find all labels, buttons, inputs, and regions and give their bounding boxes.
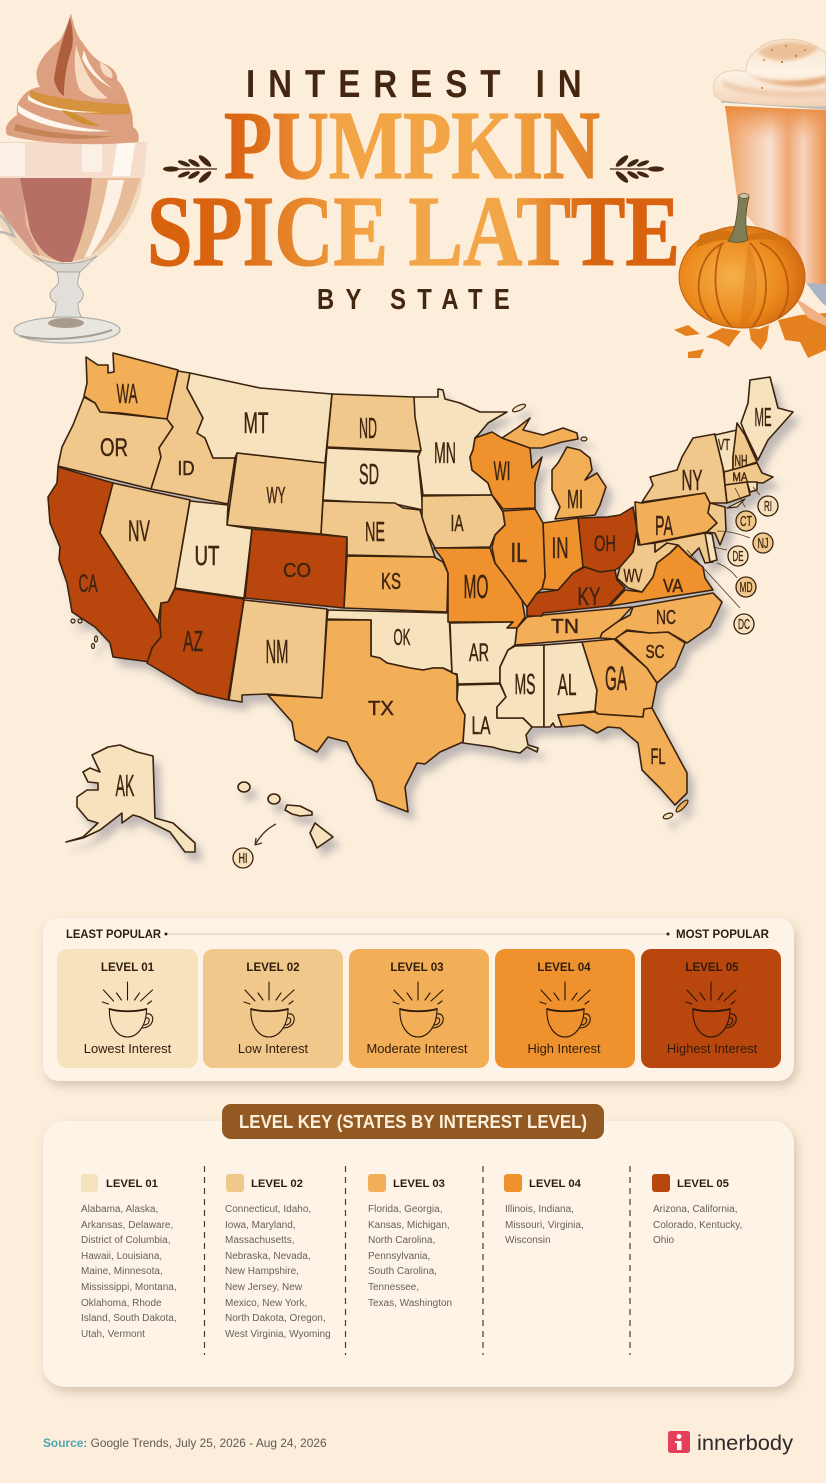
heading: interest in: INTEREST IN [246,61,582,106]
state: Mississippi [497,645,544,727]
column: level 03 [368,1174,452,1309]
state labels: WV [624,566,642,586]
column: level 01: LEVEL 01 [106,1178,158,1190]
state: Oregon [58,397,173,489]
column: level 02 [225,1174,331,1340]
logo: innerbody: innerbody [697,1432,794,1455]
state: Tennessee [515,607,632,645]
state: Pennsylvania [635,493,717,545]
state labels: OH [594,531,616,556]
state: Florida [558,708,687,805]
marker labels: DE [732,548,744,565]
column: level 02: LEVEL 02 [251,1178,303,1190]
state: Louisiana [457,684,538,753]
state: Missouri [434,548,525,628]
card: level 05: LEVEL 05 [685,961,739,974]
column dividers [204,1166,630,1355]
state: Indiana [542,518,583,590]
state labels: PA [655,510,673,541]
column: level 03: Pennsylvania, [368,1251,430,1262]
state: Illinois [492,509,545,607]
card: level 02 [203,949,343,1068]
state labels: FL [650,744,666,769]
state labels: AK [116,768,135,803]
scale axis: least to most popular: MOST POPULAR [676,927,769,941]
state: Vermont [715,430,737,472]
state labels [78,378,772,803]
column: level 02: North Dakota, Oregon, [225,1313,326,1324]
state: Georgia [582,639,657,717]
column: level 01 [81,1174,177,1340]
state labels: VA [663,576,683,596]
state labels: WI [494,456,510,486]
column: level 04 [504,1174,584,1246]
state: Michigan [502,418,606,519]
state labels: ID [178,458,194,480]
heading: pumpkin: PUMPKIN [224,92,600,200]
column: level 05: Ohio [653,1235,675,1246]
state labels: KY [578,583,601,611]
column: level 02: Massachusetts, [225,1235,294,1246]
state labels: NE [365,516,385,547]
state: Delaware [705,533,717,562]
card: level 03: LEVEL 03 [390,961,444,974]
panel: interest scale [43,918,794,1081]
marker labels: CT [740,513,752,530]
state: Maine [741,377,793,460]
state: New York [642,434,727,503]
state labels: TX [368,698,394,720]
text: ME [754,402,772,432]
state labels: ND [359,413,377,445]
state labels: CO [283,560,311,582]
card: level 01 [57,949,198,1068]
heading pill: level key [222,1104,604,1139]
marker labels: HI [238,850,248,867]
state: California [48,467,161,662]
state: New Jersey [707,503,726,545]
column: level 03: Texas, Washington [368,1298,452,1309]
column: level 04: LEVEL 04 [529,1178,582,1190]
source line: Source: Google Trends, July 25, 2026 - Aug 24, 2026 [43,1436,327,1450]
column: level 02: Nebraska, Nevada, [225,1251,311,1262]
state: Wyoming [227,453,325,534]
state labels: IL [510,537,528,568]
state: New Hampshire [733,423,757,470]
icon: left leaf sprig [163,154,217,184]
state: New Mexico [229,600,327,702]
state labels: GA [605,660,627,698]
state: West Virginia [617,530,678,592]
state: Utah [175,501,252,598]
map: United States by interest level [48,353,793,852]
falling leaves [674,297,826,358]
card: level 02: LEVEL 02 [246,961,300,974]
state labels: TN [551,616,579,638]
state labels: NC [656,607,676,629]
state: Alabama [544,642,597,727]
state: Oklahoma [327,610,452,672]
state labels: UT [194,540,220,571]
state labels: AZ [183,626,203,658]
state labels: MN [434,437,456,470]
state labels: MI [567,484,583,514]
column: level 01: Alabama, Alaska, [81,1204,158,1215]
column: level 01: Hawaii, Louisiana, [81,1251,162,1262]
card: level 05: Highest Interest [667,1041,758,1056]
column: level 01: Maine, Minnesota, [81,1266,163,1277]
column: level 02: Mexico, New York, [225,1298,307,1309]
state: Nevada [100,483,190,622]
card: level 04 [495,949,635,1068]
state labels: NM [266,633,288,670]
state: Virginia [610,545,713,606]
state: South Dakota [323,448,423,510]
column: level 02: West Virginia, Wyoming [225,1329,331,1340]
state labels: MT [244,407,268,440]
state: Arkansas [450,622,517,684]
state labels: SD [359,459,379,491]
card: level 04: High Interest [527,1041,601,1056]
marker labels: DC [738,616,750,633]
column: level 05 [652,1174,742,1246]
marker labels: RI [764,498,772,515]
state: Texas [268,620,465,812]
column: level 05: Colorado, Kentucky, [653,1220,742,1231]
state labels: MA [732,470,748,484]
state labels: KS [381,568,401,594]
state labels: VT [718,437,730,454]
state: Maryland [655,533,713,563]
state labels: LA [472,712,491,740]
state labels: NY [682,465,702,497]
column: level 01: Island, South Dakota, [81,1313,177,1324]
arrows [255,487,760,845]
card: level 05 [641,949,781,1068]
state labels: NH [734,453,748,470]
column: level 03: Florida, Georgia, [368,1204,442,1215]
column: level 05: LEVEL 05 [677,1178,729,1190]
marker labels: MD [740,579,753,596]
state: Iowa [422,495,505,548]
state: Kansas [344,556,448,612]
state: North Carolina [600,593,722,643]
heading: spice latte: SPICE LATTE [147,175,680,287]
column: level 04: Illinois, Indiana, [505,1204,574,1215]
state: Rhode Island [747,482,757,492]
column: level 05: Arizona, California, [653,1204,737,1215]
state labels: MS [514,669,536,701]
state: Idaho [151,371,235,504]
column: level 01: Utah, Vermont [81,1329,145,1340]
state: North Dakota [327,394,421,451]
column: level 03: South Carolina, [368,1266,437,1277]
column: level 02: New Jersey, New [225,1282,303,1293]
state: Washington [84,353,178,419]
state: Minnesota [414,389,507,495]
state labels: IN [552,532,568,565]
scale axis: least to most popular: LEAST POPULAR [66,927,161,941]
card: level 01: LEVEL 01 [101,961,155,974]
column: level 03: LEVEL 03 [393,1178,445,1190]
column: level 02: New Hampshire, [225,1266,299,1277]
column: level 02: Connecticut, Idaho, [225,1204,311,1215]
column: level 04: Missouri, Virginia, [505,1220,584,1231]
callouts: small state markers with arrows [233,487,778,868]
state: Arizona [147,589,244,700]
state: Massachusetts [724,463,773,485]
heading pill: level key: LEVEL KEY (STATES BY INTEREST LEVEL) [239,1112,587,1132]
heading: by state: BY STATE [317,283,510,316]
illustration: pumpkin spice latte and pumpkin [674,39,826,358]
column: level 03: North Carolina, [368,1235,435,1246]
state: Montana [187,373,332,463]
scale axis: least to most popular [66,927,769,941]
state labels: OR [100,434,128,462]
state: Alaska [66,745,195,852]
state labels: NV [128,515,150,548]
state labels: IA [450,510,464,536]
marker labels: NJ [758,535,768,552]
state: Kentucky [527,567,625,616]
column: level 01: District of Columbia, [81,1235,170,1246]
column: level 02: Iowa, Maryland, [225,1220,296,1231]
card: level 04: LEVEL 04 [537,961,591,974]
marker labels [238,498,772,867]
circle markers [233,496,778,868]
state: Ohio [578,507,637,572]
panel: level key [43,1104,794,1387]
state labels: SC [646,642,664,662]
illustration: whipped cream latte glass [0,13,147,343]
state labels: MO [464,568,488,605]
state labels: AR [469,639,489,667]
state: Colorado [245,529,347,608]
card: level 03 [349,949,489,1068]
state labels: WY [266,482,286,508]
column: level 04: Wisconsin [505,1235,551,1246]
state labels: WA [116,378,138,409]
state labels: AL [558,667,576,702]
card: level 02: Low Interest [238,1041,309,1056]
column: level 01: Mississippi, Montana, [81,1282,177,1293]
state labels: OK [394,624,411,650]
column: level 01: Oklahoma, Rhode [81,1298,162,1309]
column: level 03: Kansas, Michigan, [368,1220,450,1231]
column: level 03: Tennessee, [368,1282,419,1293]
icon: right leaf sprig [610,154,664,184]
islands [71,403,745,820]
title [147,61,680,316]
state: Connecticut [725,482,750,503]
card: level 03: Moderate Interest [366,1041,468,1056]
card: level 01: Lowest Interest [84,1041,172,1056]
state: Hawaii [238,782,333,848]
state: Nebraska [321,501,435,557]
state: South Carolina [615,631,685,683]
state: Wisconsin [470,432,542,509]
state labels: CA [78,570,98,598]
column: level 01: Arkansas, Delaware, [81,1220,173,1231]
